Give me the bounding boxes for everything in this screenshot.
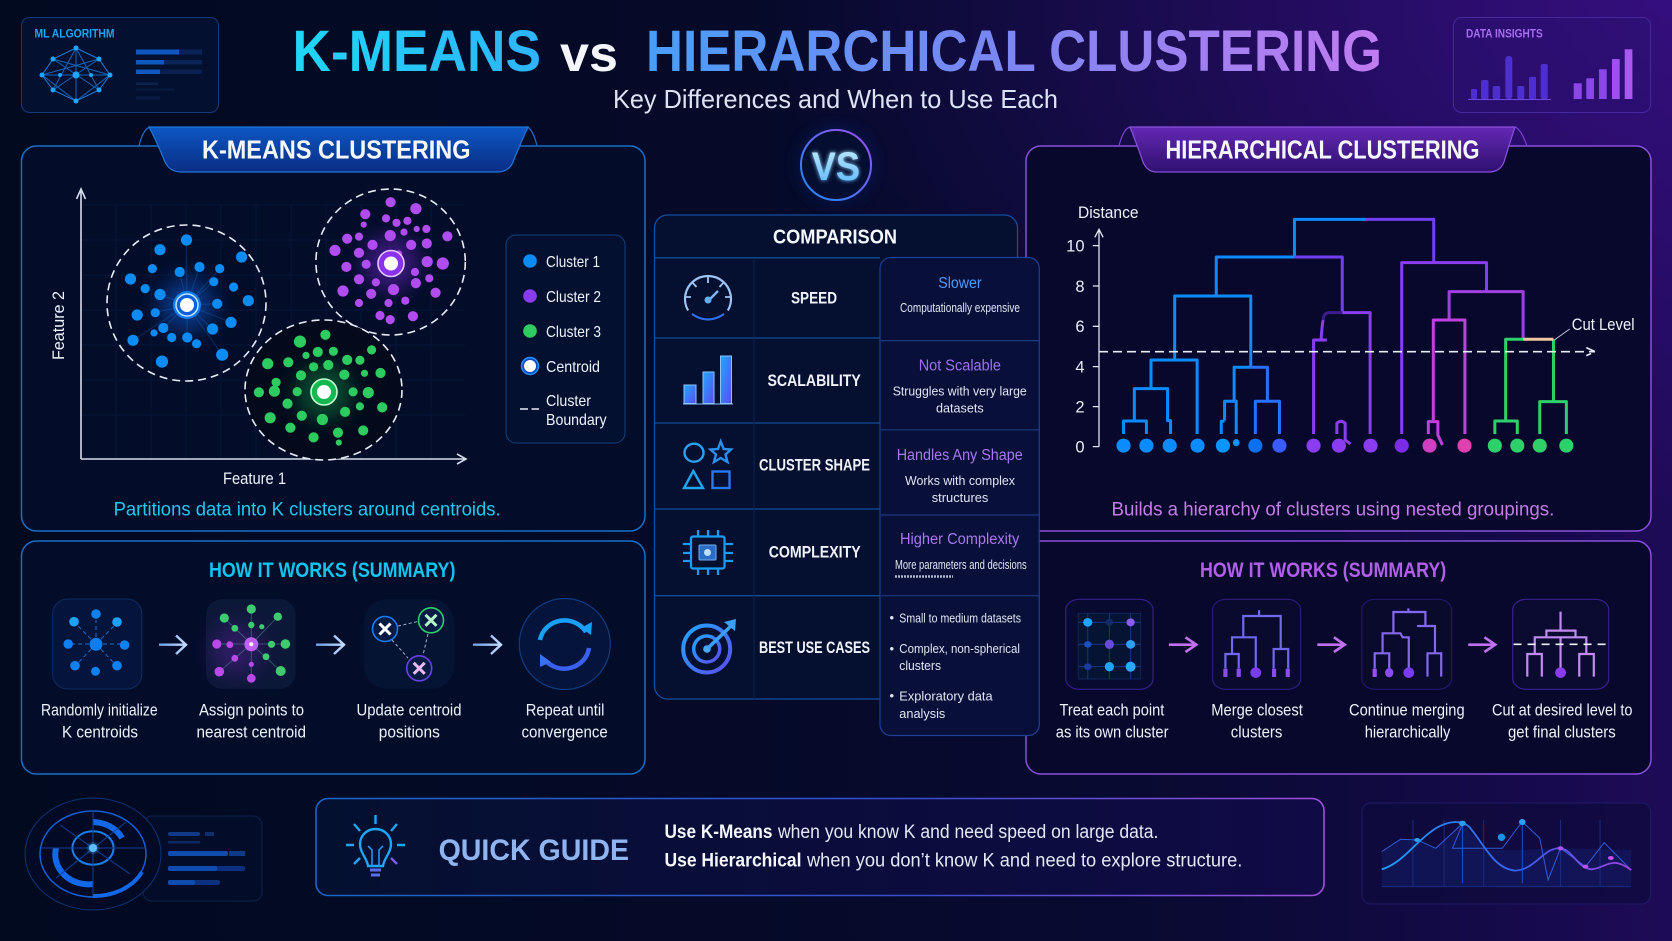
- row labels: [759, 288, 870, 657]
- legend: Cluster 2: [546, 289, 601, 306]
- axis ticks: 8: [1075, 278, 1084, 296]
- cell: cluster shape: structures: [932, 490, 989, 505]
- legend: Boundary: [546, 412, 607, 429]
- scatter chart: clusters: [50, 189, 466, 488]
- arrow: [316, 636, 344, 654]
- cell: complexity: [895, 531, 1027, 576]
- axis ticks: [1066, 238, 1084, 456]
- panel: how it works hierarchical: [1026, 541, 1651, 774]
- row labels: CLUSTER SHAPE: [759, 456, 870, 475]
- icon: shapes: [684, 442, 731, 488]
- step labels: k-means: Randomly initialize: [41, 702, 158, 720]
- cell: best use cases: analysis: [899, 706, 946, 721]
- step labels: hierarchical: hierarchically: [1365, 724, 1451, 742]
- arrow: [1169, 637, 1196, 652]
- panel: quick guide: [316, 798, 1324, 896]
- cell: best use cases: •: [890, 688, 894, 703]
- cell: best use cases: Exploratory data: [899, 688, 993, 703]
- axis ticks: 6: [1075, 318, 1084, 336]
- cell: complexity: More parameters and decisions: [895, 558, 1027, 572]
- panel: hierarchical clustering: [1026, 127, 1651, 531]
- caption: k-means: Partitions data into K clusters around centroids.: [114, 500, 501, 520]
- step labels: k-means: positions: [379, 724, 440, 742]
- title: HIERARCHICAL CLUSTERING: [646, 19, 1382, 84]
- legend: Cluster 3: [546, 324, 601, 341]
- icon: neural network: [40, 46, 112, 104]
- heading: comparison: COMPARISON: [773, 226, 897, 248]
- step 2: merge: [1213, 599, 1301, 689]
- step labels: k-means: [41, 702, 608, 742]
- quick guide text: when you don’t know K and need to explore structure.: [806, 850, 1242, 872]
- step labels: k-means: K centroids: [62, 724, 138, 742]
- heading tab: k-means: [139, 127, 537, 172]
- cell: scalability: Not Scalable: [919, 357, 1001, 374]
- cluster 2: [316, 189, 465, 335]
- subtitle: Key Differences and When to Use Each: [613, 84, 1058, 114]
- row labels: BEST USE CASES: [759, 638, 870, 657]
- step tiles and dendrogram icons: [1066, 599, 1609, 689]
- cell: speed: [900, 275, 1020, 315]
- title: [292, 19, 1382, 84]
- heading tab: hierarchical: HIERARCHICAL CLUSTERING: [1166, 134, 1480, 164]
- cell: scalability: [893, 357, 1027, 416]
- step 4: cut: [1513, 599, 1609, 689]
- cell: speed: Computationally expensive: [900, 301, 1020, 315]
- icon: light bulb: [346, 815, 405, 875]
- title: K-MEANS: [292, 19, 541, 84]
- step 1: own clusters: [1066, 599, 1153, 689]
- axis label: feature 1: Feature 1: [223, 470, 286, 488]
- bars: ML progress: [136, 50, 202, 100]
- step labels: hierarchical: Cut at desired level to: [1492, 702, 1632, 720]
- step 2: assign points: [206, 599, 296, 689]
- panel: ML algorithm badge: ML ALGORITHM: [34, 26, 115, 40]
- cell: cluster shape: Works with complex: [905, 473, 1015, 488]
- bars: radar list: [168, 832, 245, 885]
- panel: comparison table: [654, 215, 1018, 699]
- step labels: hierarchical: [1056, 702, 1632, 742]
- radar decoration: [25, 798, 262, 910]
- step 3: update centroids: [364, 599, 454, 689]
- arrow: [159, 636, 186, 654]
- row labels: SPEED: [791, 288, 837, 308]
- cluster 1: [107, 225, 266, 381]
- bar chart: insights right: [1574, 49, 1632, 99]
- axis label: feature 2: Feature 2: [50, 291, 68, 360]
- panel: data insights badge: DATA INSIGHTS: [1466, 26, 1543, 40]
- step labels: hierarchical: as its own cluster: [1056, 724, 1169, 742]
- row labels: COMPLEXITY: [769, 542, 861, 562]
- step labels: k-means: nearest centroid: [196, 724, 306, 742]
- panel: hierarchical comparison column: [880, 258, 1039, 736]
- cell: best use cases: Small to medium datasets: [899, 610, 1021, 626]
- panel: k-means clustering: [22, 127, 645, 531]
- cell: scalability: Struggles with very large: [893, 383, 1027, 398]
- caption: hierarchical: Builds a hierarchy of clusters using nested groupings.: [1112, 500, 1554, 520]
- axis label: distance: Distance: [1078, 203, 1138, 222]
- cell: best use cases: clusters: [899, 658, 941, 673]
- legend: [506, 235, 625, 443]
- step labels: k-means: Repeat until: [526, 702, 604, 720]
- heading: quick guide: QUICK GUIDE: [439, 834, 629, 867]
- vs badge: [801, 130, 871, 200]
- step 3: continue merging: [1362, 599, 1452, 689]
- panel: ML algorithm badge: [22, 18, 218, 112]
- step 1: random centroids: [53, 599, 142, 689]
- axis ticks: 2: [1075, 398, 1084, 416]
- axis ticks: 4: [1075, 358, 1084, 376]
- panel: how it works k-means: [22, 541, 645, 774]
- cell: cluster shape: Handles Any Shape: [897, 447, 1023, 464]
- dendrogram: [1066, 203, 1634, 456]
- title: vs: [560, 26, 618, 82]
- axes: [76, 189, 466, 464]
- cell: best use cases: •: [890, 610, 894, 625]
- quick guide text: Use Hierarchical: [664, 850, 802, 872]
- cell: scalability: datasets: [936, 400, 984, 416]
- legend: Cluster 1: [546, 254, 600, 271]
- quick guide text: [664, 822, 1242, 872]
- step labels: hierarchical: get final clusters: [1508, 724, 1616, 742]
- step labels: hierarchical: Merge closest: [1211, 702, 1303, 720]
- heading: how it works k-means: HOW IT WORKS (SUMMARY): [209, 559, 455, 582]
- step 4: repeat: [519, 598, 610, 690]
- icon: chip: [683, 530, 733, 575]
- axis ticks: 10: [1066, 238, 1084, 256]
- legend: Centroid: [546, 359, 600, 376]
- bar chart: insights left: [1468, 56, 1551, 100]
- label: cut level: Cut Level: [1572, 315, 1634, 334]
- arrow: [473, 636, 501, 654]
- legend: Cluster: [546, 393, 592, 410]
- cell: best use cases: Complex, non-spherical: [899, 641, 1020, 656]
- step labels: k-means: Update centroid: [356, 702, 462, 720]
- heading tab: k-means: K-MEANS CLUSTERING: [202, 134, 470, 164]
- step labels: hierarchical: Continue merging: [1349, 702, 1465, 720]
- cluster 3: [245, 320, 402, 460]
- heading: how it works hierarchical: HOW IT WORKS (SUMMARY): [1200, 559, 1446, 582]
- leaf nodes: [1116, 439, 1573, 453]
- icon: speedometer: [685, 276, 731, 320]
- step labels: k-means: convergence: [522, 724, 608, 742]
- arrow: [1468, 637, 1495, 652]
- heading tab: hierarchical: [1119, 127, 1527, 172]
- quick guide text: Use K-Means: [664, 822, 772, 843]
- cut level line: [1099, 348, 1595, 356]
- vs badge: VS: [812, 145, 860, 189]
- axis ticks: 0: [1075, 438, 1084, 456]
- step labels: hierarchical: clusters: [1231, 724, 1282, 742]
- icon: target: [683, 619, 736, 672]
- panel: data insights badge: [1454, 18, 1650, 112]
- cell: cluster shape: [897, 447, 1023, 505]
- arrow: [1317, 637, 1345, 652]
- step labels: hierarchical: Treat each point: [1060, 702, 1165, 720]
- step labels: k-means: Assign points to: [199, 702, 304, 720]
- quick guide text: when you know K and need speed on large data.: [777, 822, 1158, 843]
- cell: best use cases: [890, 610, 1021, 721]
- cell: speed: Slower: [938, 275, 982, 292]
- row labels: SCALABILITY: [768, 371, 861, 390]
- icon: bar chart: [683, 356, 733, 404]
- cell: complexity: Higher Complexity: [900, 531, 1020, 548]
- line chart decoration: [1362, 803, 1650, 904]
- cell: best use cases: •: [890, 641, 894, 656]
